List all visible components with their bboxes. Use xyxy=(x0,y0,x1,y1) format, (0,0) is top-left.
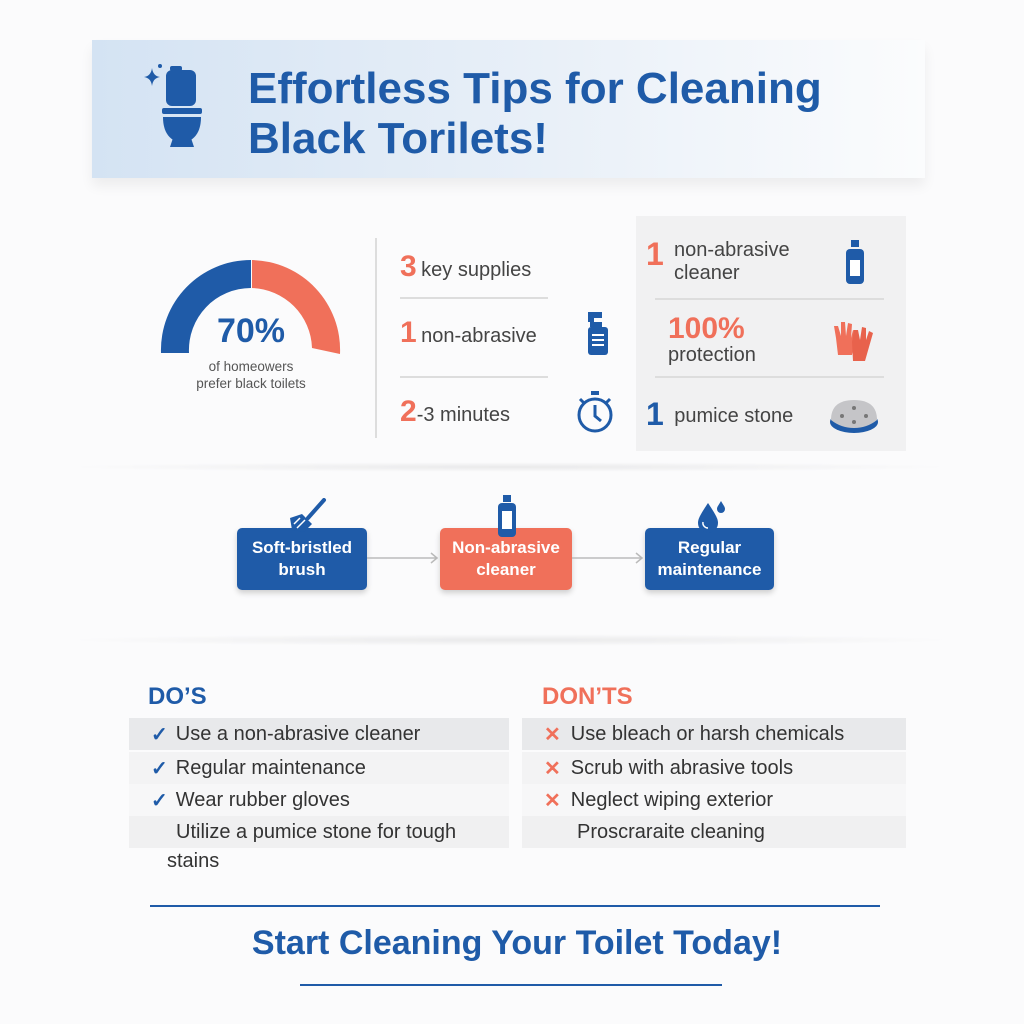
icon: brush xyxy=(290,498,326,528)
item: cleaner xyxy=(646,236,790,284)
title: Effortless Tips for Cleaning xyxy=(248,64,822,113)
icon: bottle xyxy=(498,495,516,537)
panel: supplies: 1 xyxy=(646,236,664,272)
panel: do's: ✓ xyxy=(151,790,168,812)
panel: supplies: non-abrasive cleaner xyxy=(674,239,790,284)
panel: supplies xyxy=(636,216,906,451)
title xyxy=(248,64,822,163)
step 2: cleaner: Non-abrasive xyxy=(452,538,560,557)
icon: gloves xyxy=(834,322,873,361)
panel: do's: stains xyxy=(167,850,219,872)
panel: do's xyxy=(129,683,509,872)
panel: do's: Regular maintenance xyxy=(176,756,366,778)
panel: don'ts: Use bleach or harsh chemicals xyxy=(571,722,844,744)
step 1: brush: brush xyxy=(278,560,326,579)
header banner xyxy=(92,40,925,178)
arrow xyxy=(367,552,438,564)
panel: don'ts: ✕ xyxy=(544,758,561,780)
panel: do's: ✓ xyxy=(151,758,168,780)
step 2: cleaner xyxy=(440,528,572,590)
title: Black Torilets! xyxy=(248,114,548,163)
gauge chart xyxy=(160,260,340,391)
gauge caption xyxy=(196,359,306,391)
icon: spray bottle xyxy=(588,312,608,355)
icon: pumice stone xyxy=(830,400,878,433)
icon: bottle xyxy=(846,240,864,284)
item: protection: 100% xyxy=(668,312,745,345)
icon: water drop xyxy=(698,501,725,529)
item: pumice: 1 pumice stone xyxy=(646,396,793,432)
heading: do's: DO’S xyxy=(148,683,207,710)
step 3: maintenance: Regular xyxy=(678,538,741,557)
flow: steps xyxy=(234,495,776,596)
step 2: cleaner: cleaner xyxy=(476,560,536,579)
panel: do's: ✓ xyxy=(151,724,168,746)
step 3: maintenance xyxy=(645,528,774,590)
gauge value: 70% xyxy=(217,312,285,350)
panel: don'ts xyxy=(522,683,906,848)
item: protection xyxy=(668,312,756,366)
panel: do's: Wear rubber gloves xyxy=(176,788,350,810)
arrow xyxy=(572,552,643,564)
icon: toilet xyxy=(144,64,202,147)
panel: don'ts: ✕ xyxy=(544,724,561,746)
stat: key supplies: 3 key supplies xyxy=(400,250,531,283)
panel: do's: Utilize a pumice stone for tough xyxy=(176,820,456,842)
stat: minutes: 2-3 minutes xyxy=(400,395,510,428)
panel: don'ts: Proscraraite cleaning xyxy=(577,820,765,842)
step 1: brush: Soft-bristled xyxy=(252,538,352,557)
gauge caption: prefer black toilets xyxy=(196,376,306,391)
panel: do's: Use a non-abrasive cleaner xyxy=(176,722,420,744)
icon: stopwatch xyxy=(578,391,612,432)
panel: don'ts: Scrub with abrasive tools xyxy=(571,756,793,778)
stat: non-abrasive: 1 non-abrasive xyxy=(400,316,537,349)
heading: don'ts: DON’TS xyxy=(542,683,633,710)
gauge caption: of homeowers xyxy=(209,359,293,374)
step 1: brush xyxy=(237,528,367,590)
step 3: maintenance: maintenance xyxy=(658,560,761,579)
call to action: Start Cleaning Your Toilet Today! xyxy=(252,924,782,962)
item: protection: protection xyxy=(668,344,756,366)
panel: don'ts: Neglect wiping exterior xyxy=(571,788,773,810)
panel: don'ts: ✕ xyxy=(544,790,561,812)
